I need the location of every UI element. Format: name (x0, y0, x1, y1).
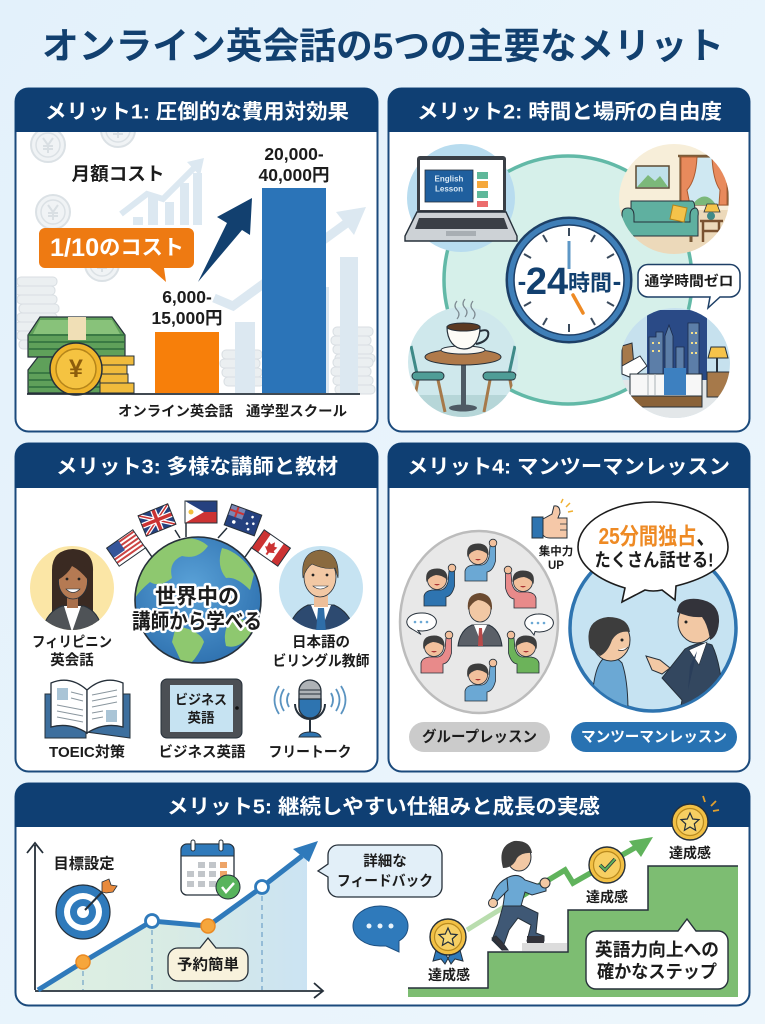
callout: easy booking (168, 938, 248, 981)
callout: one tenth cost: 1/10のコスト (50, 234, 184, 262)
globe caption (132, 586, 262, 634)
panel: merit 3 teachers and materials (15, 443, 378, 772)
icon: tablet: ビジネス (175, 692, 227, 708)
ring background (444, 156, 692, 404)
heading: merit 5: メリット5: 継続しやすい仕組みと成長の実感 (167, 794, 600, 818)
speech bubble: 25分間独占、 (598, 523, 716, 549)
label: bilingual teacher: ビリングル教師 (272, 652, 370, 670)
label: focus up: UP (548, 560, 564, 572)
student lower left (421, 631, 453, 673)
label: Philippine English: フィリピニン (32, 634, 112, 651)
heading: merit 3: メリット3: 多様な講師と教材 (56, 456, 338, 478)
callout: zero commute (638, 264, 740, 308)
icon: microphone (274, 680, 346, 737)
student bottom (465, 659, 497, 701)
flag: Canada (252, 530, 290, 566)
clock: - (613, 266, 621, 296)
clock: 時間 (568, 270, 612, 296)
header bar: merit 2 (388, 88, 750, 132)
medal: third (672, 796, 719, 840)
icon: tablet (161, 679, 242, 738)
icon: tablet: 英語 (188, 710, 215, 726)
label: achievement 1: 達成感 (428, 967, 470, 983)
pill: group lesson (409, 722, 550, 752)
callout: one tenth cost (39, 228, 194, 282)
callout: detailed feedback: 詳細な (363, 852, 407, 870)
globe caption: 講師から学べる (132, 610, 262, 634)
header bar: merit 3 (15, 443, 378, 488)
scene: laptop: English (435, 174, 464, 184)
label: Philippine English (32, 634, 112, 669)
label: commuting school: 通学型スクール (246, 403, 347, 419)
staircase (408, 866, 738, 997)
student lower right (507, 631, 539, 673)
small chat bubble left (407, 613, 436, 634)
portrait: man teacher (279, 546, 363, 632)
label: achievement 2: 達成感 (586, 889, 628, 905)
label: free talk: フリートーク (268, 744, 352, 761)
label: goal setting: 目標設定 (54, 854, 114, 872)
globe caption: 世界中の (155, 586, 239, 608)
student upper left (424, 564, 456, 606)
scene: city bedroom (620, 308, 730, 418)
scene: cafe (408, 298, 516, 417)
panel: merit 4 one-on-one (388, 443, 750, 772)
arrow: dark up (198, 198, 252, 282)
value: online: 6,000- (162, 287, 212, 307)
clock: 24 (526, 261, 568, 303)
callout: zero commute: 通学時間ゼロ (644, 273, 734, 289)
panel: merit 1 cost (15, 88, 378, 432)
label: bilingual teacher: 日本語の (292, 634, 350, 651)
scene: laptop: Lesson (435, 184, 463, 194)
icon: money and coins: ¥ (69, 355, 83, 383)
group lesson scene (400, 531, 558, 713)
bar: school (262, 188, 326, 393)
axis baseline (27, 393, 360, 395)
label: focus up: 集中力 (539, 544, 573, 558)
label: business English: ビジネス英語 (158, 743, 246, 761)
growth chart (27, 841, 323, 998)
value: online (151, 287, 223, 328)
heading: merit 1: メリット1: 圧倒的な費用対効果 (45, 100, 350, 124)
label: monthly cost: 月額コスト (72, 164, 164, 184)
callout: steady steps: 英語力向上への (595, 939, 719, 960)
callout: detailed feedback (318, 845, 442, 897)
label: bilingual teacher (272, 634, 370, 670)
label: focus up (539, 544, 573, 572)
flag poles (145, 523, 252, 557)
flag: USA (107, 530, 145, 566)
speech bubble: たくさん話せる! (594, 550, 714, 570)
student upper right (504, 566, 536, 608)
value: school: 40,000円 (258, 165, 330, 185)
student top (465, 539, 497, 581)
label: TOEIC: TOEIC対策 (49, 743, 126, 761)
scene: living room (619, 144, 729, 254)
label: achievement 3: 達成感 (669, 845, 711, 861)
medal: first (430, 919, 466, 964)
portrait: woman teacher (30, 546, 114, 632)
icon: target (56, 879, 117, 939)
icon: open book (45, 680, 130, 738)
clock: - (518, 266, 526, 296)
icon: globe (130, 537, 261, 668)
icon: money and coins (28, 317, 134, 395)
callout: steady steps: 確かなステップ (597, 962, 717, 982)
callout: detailed feedback: フィードバック (337, 873, 433, 890)
medal: second (589, 847, 625, 883)
arrow: progress (467, 837, 653, 930)
header bar: merit 1 (15, 88, 378, 132)
value: online: 15,000円 (151, 308, 223, 328)
callout: easy booking: 予約簡単 (177, 956, 239, 974)
faded background coins and charts (15, 113, 375, 394)
heading: merit 4: メリット4: マンツーマンレッスン (407, 456, 730, 478)
header bar: merit 5 (15, 783, 750, 827)
icon: calendar (181, 840, 240, 899)
icon: thumbs up (532, 499, 573, 538)
one-on-one scene (568, 570, 738, 713)
heading: merit 2: メリット2: 時間と場所の自由度 (417, 100, 722, 124)
pill: group lesson: グループレッスン (422, 728, 537, 746)
icon: chat bubble (353, 906, 408, 952)
pill: one-on-one lesson (571, 722, 737, 752)
title: オンライン英会話の5つの主要なメリット (42, 26, 724, 66)
small chat bubble right (525, 614, 553, 635)
flag: UK (138, 504, 176, 536)
clock (506, 216, 632, 344)
header bar: merit 4 (388, 443, 750, 488)
scene: laptop (405, 144, 517, 252)
bar: online (155, 332, 219, 393)
panel: merit 5 continuing and growth (15, 783, 750, 1006)
value: school (258, 144, 330, 185)
callout: steady steps (586, 919, 728, 989)
label: online school: オンライン英会話 (118, 403, 233, 419)
label: Philippine English: 英会話 (50, 652, 94, 669)
speech bubble (578, 502, 728, 602)
flag: Australia (224, 504, 262, 536)
panel: merit 2 time and place (388, 88, 750, 432)
figure: climbing person (488, 841, 550, 950)
flag: Philippines (185, 501, 217, 523)
value: school: 20,000- (264, 144, 324, 164)
pill: one-on-one lesson: マンツーマンレッスン (581, 728, 727, 746)
group teacher (458, 593, 502, 646)
